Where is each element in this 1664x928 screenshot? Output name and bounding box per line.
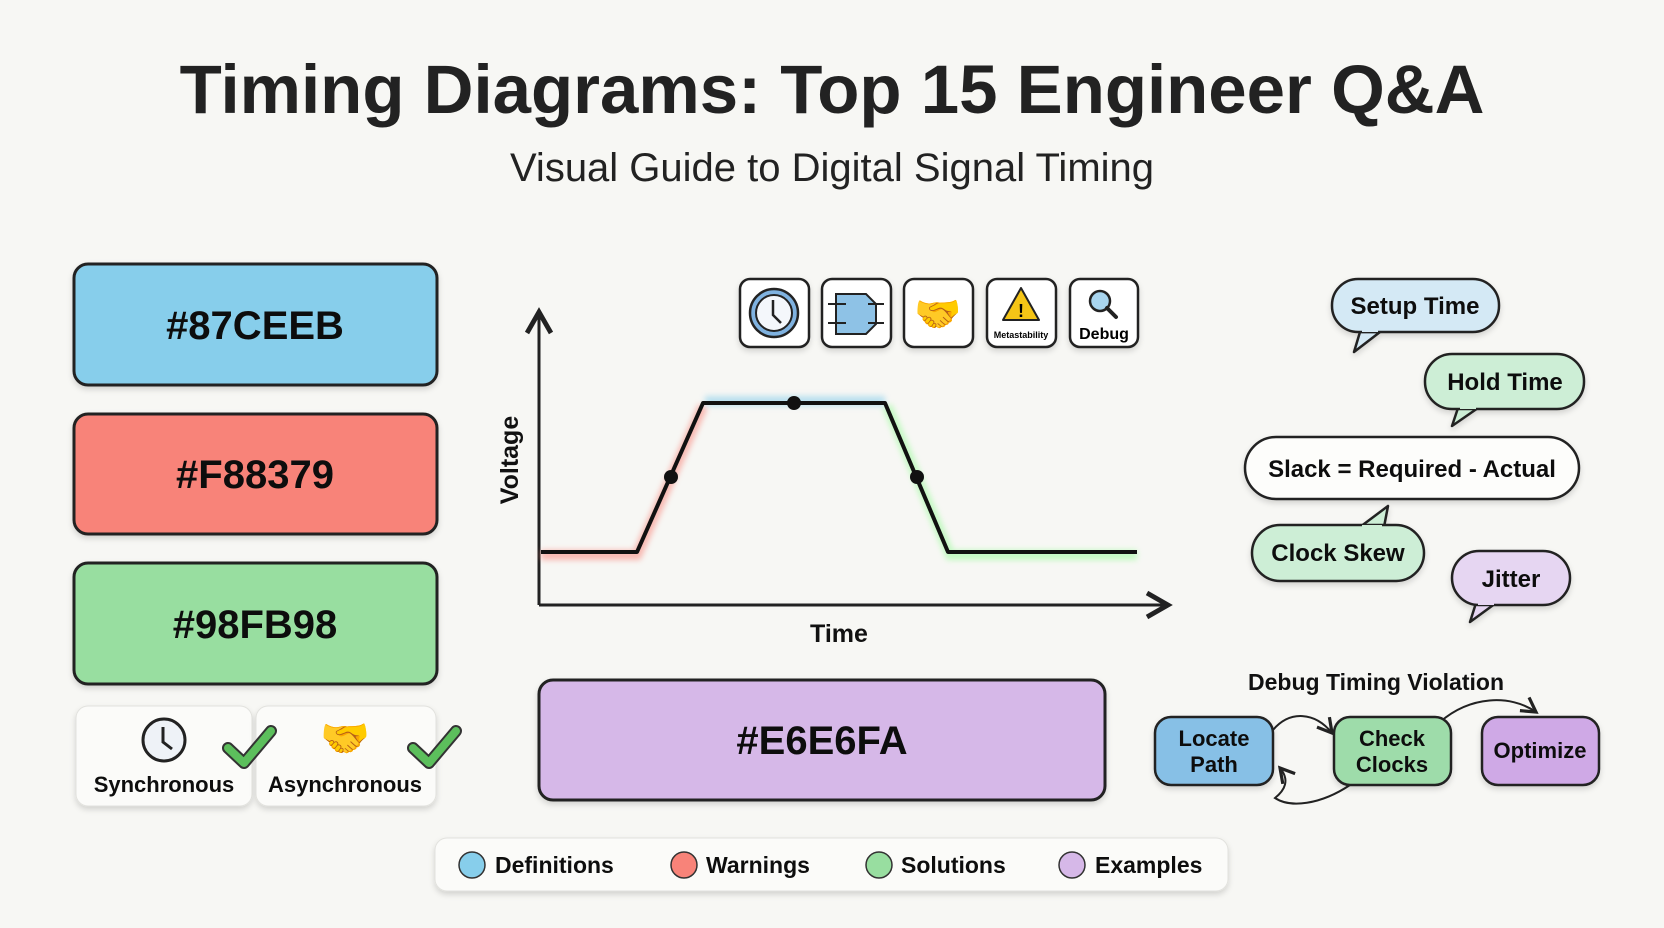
bubble: clock skew bbox=[1252, 506, 1424, 581]
icon: debug magnifier: Debug bbox=[1079, 326, 1129, 343]
panel: green color box: #98FB98 bbox=[173, 603, 337, 647]
card: synchronous: Synchronous bbox=[94, 772, 234, 797]
icon: handshake bbox=[904, 279, 973, 347]
legend bbox=[435, 838, 1228, 891]
card: asynchronous: Asynchronous bbox=[268, 772, 422, 797]
icon: debug magnifier bbox=[1070, 279, 1138, 347]
bubble: jitter bbox=[1452, 551, 1570, 622]
flow: debug timing violation bbox=[1155, 669, 1599, 804]
step: check clocks bbox=[1334, 717, 1451, 785]
card: asynchronous bbox=[256, 706, 436, 806]
bubble: setup time: Setup Time bbox=[1351, 293, 1479, 320]
legend: Warnings bbox=[706, 852, 810, 878]
panel: purple color box: #E6E6FA bbox=[736, 719, 908, 763]
axis label: voltage: Voltage bbox=[496, 416, 524, 504]
step: locate path: Path bbox=[1190, 752, 1238, 777]
bubble: clock skew: Clock Skew bbox=[1271, 540, 1405, 567]
icon: flip-flop bbox=[822, 279, 891, 347]
icon: check 2 bbox=[413, 731, 456, 763]
icon: metastability warning: ! bbox=[1018, 301, 1024, 321]
bubble: setup time bbox=[1332, 279, 1499, 352]
axis label: time: Time bbox=[810, 620, 868, 648]
step: optimize bbox=[1482, 717, 1599, 785]
step: optimize: Optimize bbox=[1494, 738, 1586, 763]
bubble: hold time: Hold Time bbox=[1447, 369, 1563, 396]
step: check clocks: Clocks bbox=[1356, 752, 1428, 777]
icon: metastability warning bbox=[987, 279, 1056, 347]
arrows bbox=[1273, 716, 1332, 733]
panel: red color box bbox=[74, 414, 437, 534]
legend: Examples bbox=[1095, 852, 1202, 878]
panel: green color box bbox=[74, 563, 437, 684]
icon: clock bbox=[740, 279, 809, 347]
panel: red color box: #F88379 bbox=[176, 453, 334, 497]
icon: check 1 bbox=[228, 731, 271, 763]
step: check clocks: Check bbox=[1359, 726, 1426, 751]
panel: blue color box bbox=[74, 264, 437, 385]
icon: clock bbox=[143, 719, 185, 761]
bubble: hold time bbox=[1425, 354, 1584, 426]
legend: Definitions bbox=[495, 852, 614, 878]
subtitle: Visual Guide to Digital Signal Timing bbox=[510, 146, 1154, 190]
title: Timing Diagrams: Top 15 Engineer Q&A bbox=[180, 51, 1484, 128]
chart: timing waveform bbox=[496, 312, 1168, 648]
legend: Solutions bbox=[901, 852, 1006, 878]
icon: metastability warning: Metastability bbox=[994, 330, 1048, 340]
step: locate path: Locate bbox=[1179, 726, 1249, 751]
step: locate path bbox=[1155, 717, 1273, 785]
bubble: slack formula bbox=[1245, 437, 1579, 499]
panel: purple color box bbox=[539, 680, 1105, 800]
bubble: slack formula: Slack = Required - Actual bbox=[1268, 456, 1556, 483]
bubble: jitter: Jitter bbox=[1482, 566, 1540, 593]
icon row bbox=[740, 279, 1138, 347]
panel: blue color box: #87CEEB bbox=[166, 304, 344, 348]
card: synchronous bbox=[76, 706, 252, 806]
flow heading: Debug Timing Violation bbox=[1248, 669, 1504, 695]
icon: handshake: 🤝 bbox=[914, 294, 962, 336]
icon: handshake: 🤝 bbox=[320, 717, 370, 761]
